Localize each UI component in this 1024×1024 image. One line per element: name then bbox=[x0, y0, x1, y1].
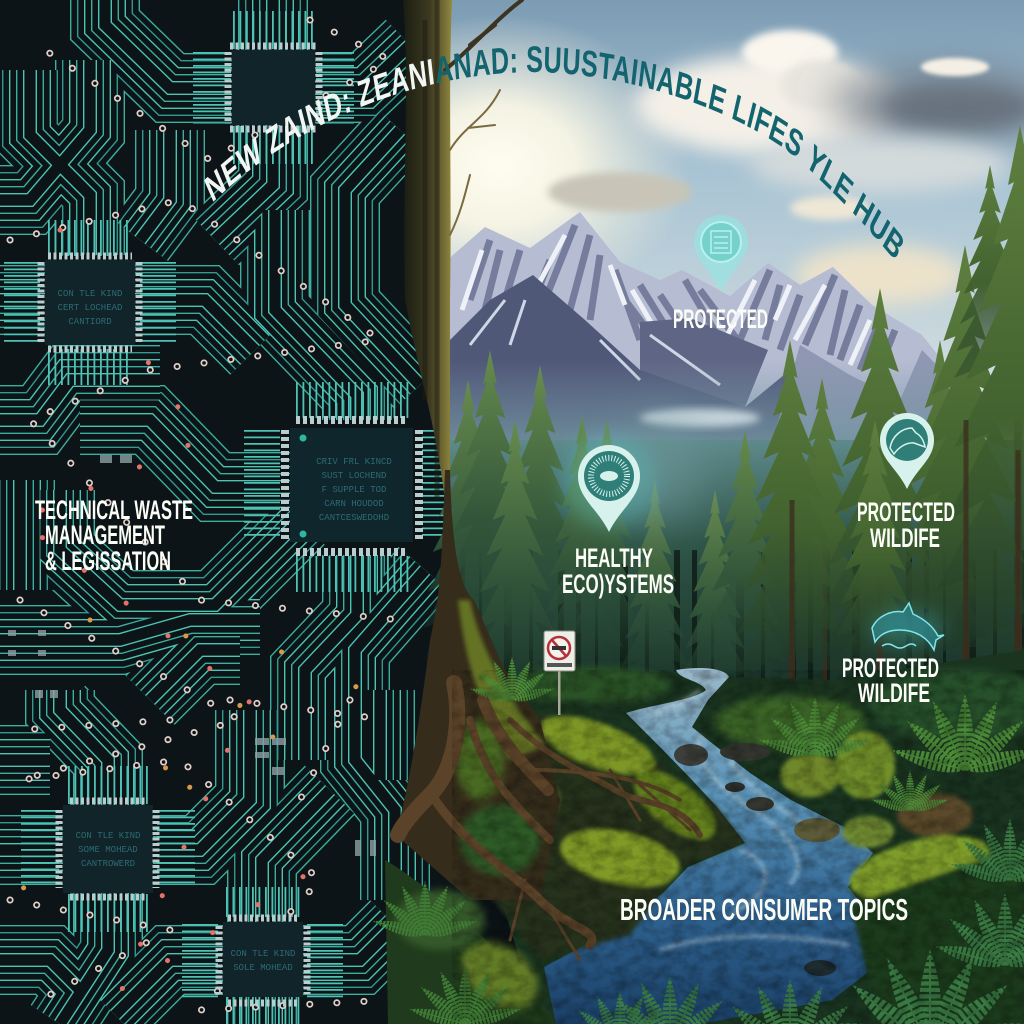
forest: foreground firs bbox=[733, 125, 1024, 700]
forest texture overlay bbox=[452, 670, 1024, 1024]
chip: bottom: SOLE MOHEAD bbox=[233, 963, 293, 973]
label: protected wildlife upper bbox=[857, 497, 955, 553]
chip: center: CRIV FRL KINCD bbox=[316, 457, 392, 467]
circuit pads bbox=[10, 20, 400, 1010]
icon: protected map pin bbox=[694, 215, 748, 292]
small components bbox=[8, 455, 376, 856]
chip: bottom bbox=[219, 918, 307, 1003]
icon: no smoking sign bbox=[544, 631, 575, 715]
panel: circuit board traces bbox=[0, 0, 440, 1024]
label: technical waste management and legislation: & LEGISSATION bbox=[45, 546, 171, 576]
label: technical waste management and legislation: TECHNICAL WASTE bbox=[35, 495, 193, 525]
ferns bbox=[470, 657, 1024, 1024]
label: healthy ecosystems: ECO)YSTEMS bbox=[562, 569, 674, 599]
label: healthy ecosystems bbox=[562, 543, 674, 599]
label: protected wildlife lower bbox=[842, 653, 939, 708]
forest background bbox=[420, 350, 1024, 730]
mountains bbox=[450, 212, 987, 440]
chip: lower left: CON TLE KIND bbox=[76, 831, 140, 841]
river rocks bbox=[674, 743, 840, 976]
icon: glowing dolphin bbox=[871, 603, 944, 650]
chip: top bbox=[228, 46, 319, 129]
chip: left bbox=[41, 256, 139, 349]
moss banks bbox=[470, 704, 1024, 1024]
chip: lower left bbox=[59, 801, 156, 897]
label: healthy ecosystems: HEALTHY bbox=[575, 543, 653, 573]
tree trunk bbox=[396, 0, 560, 900]
chip: lower left: SOME MOHEAD bbox=[78, 845, 138, 855]
chip: lower left: CANTROWERD bbox=[81, 859, 135, 869]
chip: center: F SUPPLE TOD bbox=[322, 485, 386, 495]
chip: left: CON TLE KIND bbox=[58, 289, 122, 299]
undergrowth: bottom left bbox=[373, 860, 556, 1024]
label: protected wildlife lower: WILDIFE bbox=[858, 678, 930, 708]
chip: bottom: CON TLE KIND bbox=[231, 949, 295, 959]
chip: center: CANTCESWEDOHD bbox=[319, 513, 389, 523]
river bbox=[544, 668, 893, 1024]
label: protected wildlife lower: PROTECTED bbox=[842, 653, 939, 683]
icon: wildlife map pin bbox=[880, 413, 934, 489]
icon: healthy ecosystems map pin bbox=[563, 436, 655, 532]
forest floor bbox=[470, 650, 1024, 1024]
sky bbox=[450, 0, 1024, 440]
clouds bbox=[548, 30, 1024, 305]
tree roots bbox=[398, 683, 700, 960]
chip: center: SUST LOCHEND bbox=[322, 471, 386, 481]
chip pin combs bbox=[22, 30, 440, 1012]
chip: center: CARN HOUDOD bbox=[324, 499, 384, 509]
chip: left: CERT LOCHEAD bbox=[58, 303, 122, 313]
label: protected wildlife upper: PROTECTED bbox=[857, 497, 955, 527]
label: technical waste management and legislation: MANAGEMENT bbox=[45, 520, 165, 550]
label: technical waste management and legislation bbox=[35, 495, 193, 576]
label: protected: PROTECTED bbox=[673, 304, 768, 334]
title: curved: NEW ZAIND: ZEANIANAD: SUUSTAINABLE LIFES YLE HUB bbox=[204, 46, 903, 258]
label: protected wildlife upper: WILDIFE bbox=[870, 523, 940, 553]
tree branches bbox=[445, 0, 522, 235]
chip: left: CANTIORD bbox=[68, 317, 112, 327]
chip: center bbox=[285, 420, 419, 552]
background: dark circuit board base bbox=[0, 0, 470, 1024]
